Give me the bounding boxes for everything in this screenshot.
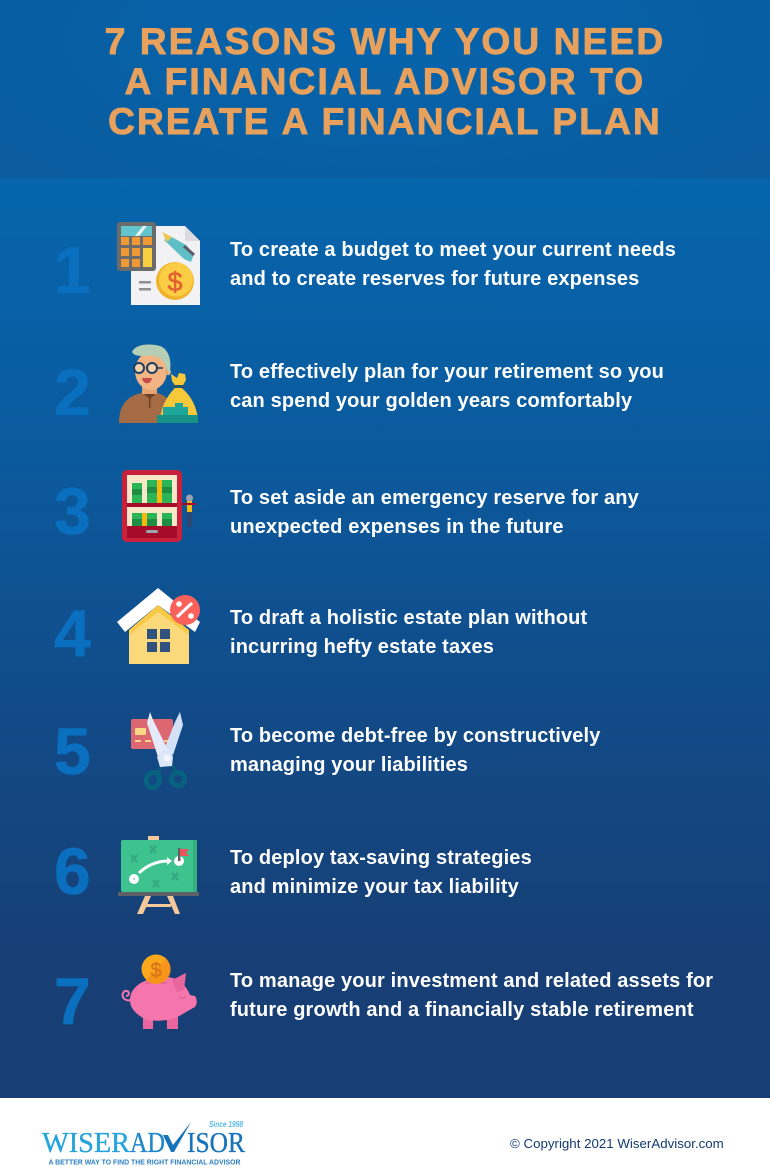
title: 7 REASONS WHY YOU NEED [105,21,665,62]
reason 5 text: To become debt-free by constructively [230,724,600,746]
logo: WiserAdvisor: AD [130,1127,165,1159]
reason 4 text: incurring hefty estate taxes [230,636,494,658]
reason 2 text: To effectively plan for your retirement so you [230,360,664,382]
icon: piggy bank with coin: $ [150,960,162,982]
reason 2 text: can spend your golden years comfortably [230,390,632,412]
reason 1 text: and to create reserves for future expenses [230,268,639,290]
reason 5 text: managing your liabilities [230,754,468,776]
footer band [0,1098,770,1174]
icon: strategy board on easel [118,836,199,914]
reason 1 text [230,238,676,290]
icon: house with percent badge [117,588,200,664]
reason 3 text: unexpected expenses in the future [230,516,564,538]
reason 4 text [230,607,587,658]
title [105,21,665,142]
number 5: 5 [54,714,91,788]
icon: emergency reserve machine [122,470,196,542]
reason 4 text: To draft a holistic estate plan without [230,607,587,629]
icon: scissors cutting credit card [131,712,184,790]
reason 7 text [230,970,713,1020]
reason 7 text: To manage your investment and related assets for [230,970,713,992]
number 6: 6 [54,834,91,908]
reason 5 text [230,724,600,776]
logo: WiserAdvisor: A BETTER WAY TO FIND THE RIGHT FINANCIAL ADVISOR [48,1158,241,1166]
reason 6 text: To deploy tax-saving strategies [230,846,532,868]
title: CREATE A FINANCIAL PLAN [108,101,662,142]
reason 3 text: To set aside an emergency reserve for any [230,486,639,508]
reason 1 text: To create a budget to meet your current needs [230,238,676,260]
number 1: 1 [54,233,91,307]
logo: WiserAdvisor: Since 1998 [209,1119,243,1129]
icon: budget calculator and coin [117,222,200,305]
copyright: © Copyright 2021 WiserAdvisor.com [510,1136,724,1151]
title: A FINANCIAL ADVISOR TO [125,61,645,102]
logo: WiserAdvisor [42,1119,246,1166]
reason 3 text [230,486,639,538]
logo: WiserAdvisor: WISER [42,1127,131,1159]
number 3: 3 [54,474,91,548]
icon: retiree with money bag [119,344,198,423]
logo: WiserAdvisor: ISOR [187,1127,246,1159]
main panel background [0,178,770,1098]
reason 2 text [230,360,664,412]
header band [0,0,770,178]
icon: budget calculator and coin: $ [167,267,183,297]
number 2: 2 [54,355,91,429]
reason 7 text: future growth and a financially stable retirement [230,998,694,1020]
number 7: 7 [54,964,91,1038]
reason 6 text [230,846,532,898]
number 4: 4 [54,596,91,670]
reason 6 text: and minimize your tax liability [230,876,519,898]
icon: piggy bank with coin [123,954,197,1029]
